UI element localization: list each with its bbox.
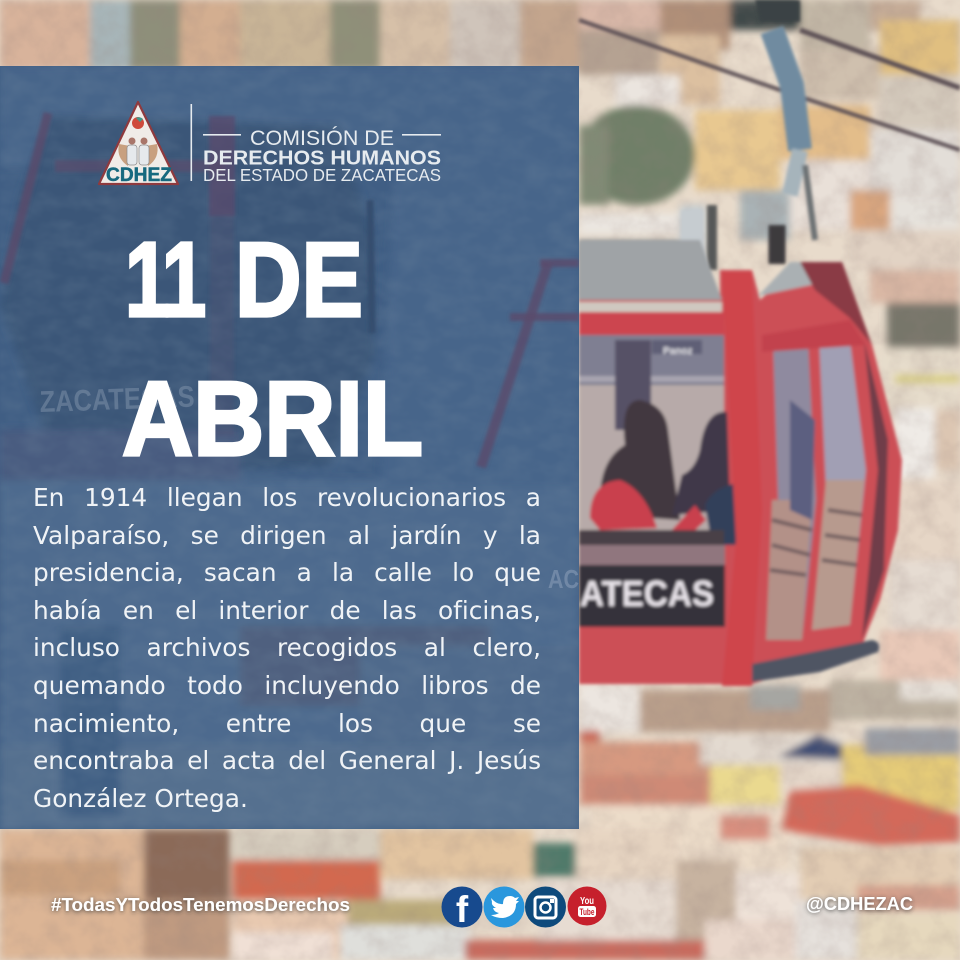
- icon: instagram: [525, 886, 566, 928]
- cable car gondola: Panoz: [663, 346, 692, 357]
- title line one: [125, 220, 363, 339]
- bottom strip: [0, 829, 144, 960]
- passengers: [615, 340, 651, 430]
- body text: presidencia, sacan a la calle lo que: [33, 558, 541, 587]
- gondola seen through the panel: [0, 66, 579, 829]
- cable car gondola: [579, 240, 902, 686]
- cables and hanger: [579, 0, 960, 270]
- icon: triangle emblem: CDHEZ: [106, 165, 172, 186]
- icon: youtube: Tube: [580, 907, 594, 917]
- icon: facebook: [442, 886, 482, 930]
- body text: nacimiento, entre los que se: [33, 709, 541, 738]
- side windows: [772, 340, 816, 640]
- icon: youtube: You: [580, 896, 594, 907]
- divider and organisation name: DEL ESTADO DE ZACATECAS: [203, 165, 441, 185]
- handle: @CDHEZAC: [806, 893, 913, 914]
- icon: youtube: [568, 886, 606, 926]
- logo: CDHEZ: [98, 100, 441, 186]
- body text: incluso archivos recogidos al clero,: [33, 633, 541, 662]
- hashtag: #TodasYTodosTenemosDerechos: [51, 895, 350, 915]
- pillar: [722, 272, 762, 686]
- title line two: ABRIL: [122, 359, 423, 478]
- body text: En 1914 llegan los revolucionarios a: [33, 483, 541, 512]
- icon: triangle emblem: [99, 102, 178, 186]
- body text: Valparaíso, se dirigen al jardín y la: [33, 521, 541, 550]
- divider and organisation name: COMISIÓN DE: [250, 127, 394, 150]
- divider and organisation name: DERECHOS HUMANOS: [203, 148, 441, 170]
- icon: facebook: f: [456, 889, 469, 930]
- body text: [33, 483, 541, 813]
- title line one: 11: [125, 220, 206, 339]
- panel: blue translucent overlay: [0, 66, 579, 829]
- body text: quemando todo incluyendo libros de: [33, 671, 541, 700]
- title line one: DE: [235, 220, 363, 339]
- right side blocks: [615, 75, 680, 105]
- body text: había en el interior de las oficinas,: [33, 596, 541, 625]
- body text: encontraba el acta del General J. Jesús: [33, 746, 541, 775]
- top strip: [0, 0, 90, 70]
- icon: twitter: [484, 886, 524, 928]
- gondola seen through the panel: ZACATECAS: [39, 381, 195, 419]
- footer: hashtag, social icons and handle: [48, 886, 915, 930]
- divider and organisation name: [190, 104, 441, 185]
- body text: González Ortega.: [33, 784, 248, 813]
- sign text: ATECAS: [580, 573, 714, 614]
- title: [122, 220, 423, 478]
- panel photo texture: [0, 66, 579, 829]
- bumper: [752, 640, 879, 682]
